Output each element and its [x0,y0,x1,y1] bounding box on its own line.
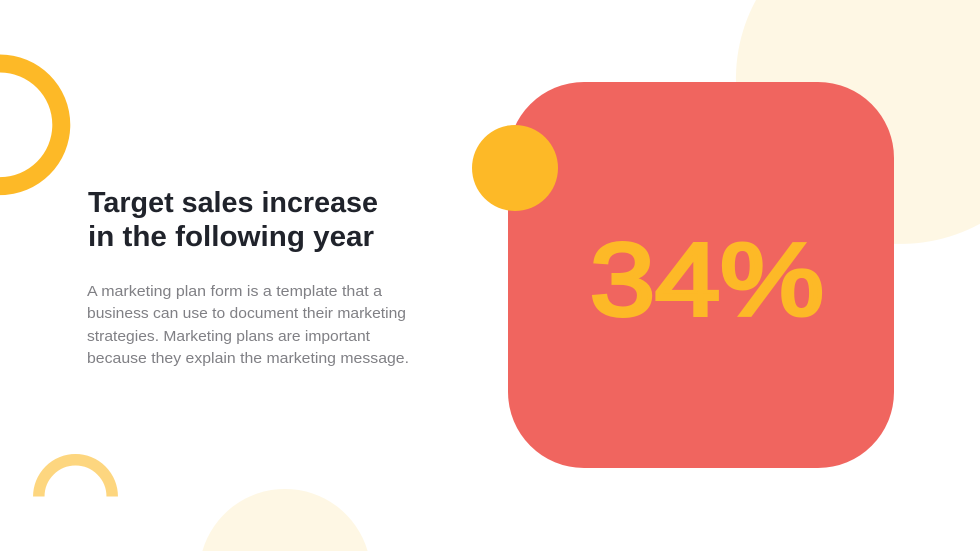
body text: A marketing plan form is a template that a [87,283,383,300]
statistic: 34%: 34% [590,222,824,337]
title: in the following year [88,221,374,253]
decorative pale circle: bottom centre [202,489,368,551]
title [88,187,378,253]
body text: because they explain the marketing message. [87,350,409,367]
body text [87,283,409,367]
panel: red statistic card [508,82,894,468]
body text: strategies. Marketing plans are important [87,328,371,345]
title: Target sales increase [88,187,378,219]
decorative yellow circle on card [472,125,558,211]
decorative ring: top left [0,54,70,195]
decorative pale circle: top right [736,0,980,244]
decorative arch: bottom left [39,460,112,496]
body text: business can use to document their marketing [87,305,406,322]
